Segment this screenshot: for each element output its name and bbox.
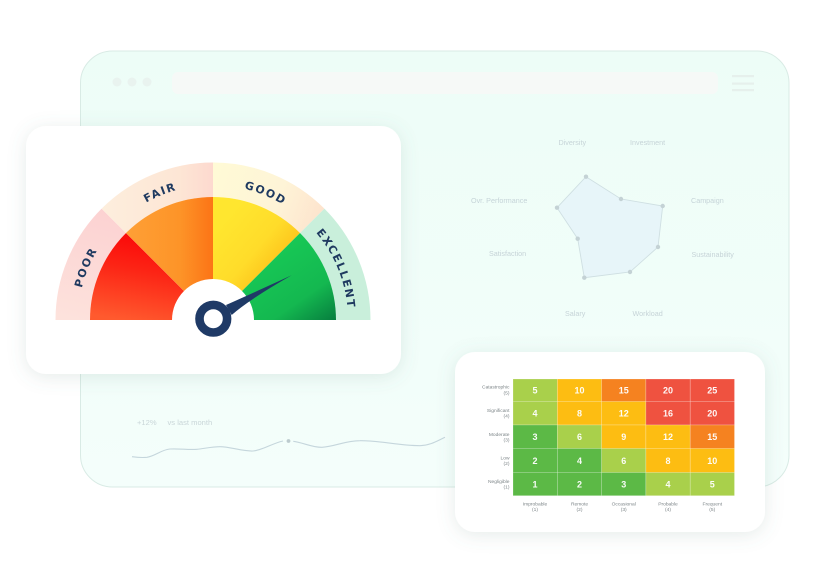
likelihood labels: (2) — [577, 507, 583, 513]
risk matrix values: 20 — [663, 386, 673, 396]
risk matrix values: 2 — [577, 480, 582, 490]
risk matrix values: 16 — [663, 408, 673, 418]
radar data points — [555, 174, 665, 280]
band: excellent — [300, 209, 371, 320]
risk matrix values: 1 — [532, 480, 538, 490]
likelihood labels: Frequent — [703, 502, 723, 508]
hamburger menu icon — [732, 75, 754, 91]
label: GOOD: GOOD — [246, 182, 285, 202]
likelihood labels: (5) — [709, 507, 716, 513]
risk matrix card — [455, 352, 765, 532]
severity labels: Negligible — [488, 479, 510, 485]
risk matrix values: 9 — [621, 432, 626, 442]
gauge colored sectors — [90, 197, 336, 320]
label: POOR: POOR — [74, 249, 97, 288]
window control dots — [112, 78, 152, 86]
risk matrix values: 5 — [710, 480, 715, 490]
risk matrix cells — [513, 379, 734, 496]
severity labels: (1) — [504, 484, 510, 490]
severity labels: (2) — [504, 461, 510, 467]
risk matrix values: 15 — [619, 386, 629, 396]
risk matrix values: 3 — [621, 480, 626, 490]
severity labels: Significant — [487, 408, 510, 414]
risk matrix values: 4 — [577, 456, 582, 466]
risk matrix values: 6 — [577, 432, 582, 442]
severity labels: Catastrophic — [482, 384, 510, 390]
severity labels: (3) — [504, 438, 510, 444]
label: FAIR: FAIR — [143, 184, 176, 202]
label: EXCELLENT: EXCELLENT — [316, 228, 356, 306]
radar axis labels: Satisfaction — [489, 249, 526, 258]
likelihood labels — [523, 502, 723, 513]
sector: orange — [126, 197, 213, 320]
sparkline panel: vs last month — [168, 418, 212, 427]
radar axis labels: Diversity — [558, 138, 586, 147]
band: good — [213, 162, 324, 233]
gauge hub — [172, 279, 254, 320]
severity labels: (4) — [504, 414, 510, 420]
radar axis labels: Workload — [632, 309, 663, 318]
radar axis labels: Sustainability — [692, 250, 734, 259]
severity labels — [482, 384, 510, 490]
sector: yellow — [213, 197, 300, 320]
radar axis labels: Investment — [630, 138, 665, 147]
likelihood labels: (1) — [532, 507, 538, 513]
likelihood labels: Occasional — [612, 502, 636, 508]
address bar — [172, 72, 718, 94]
risk matrix values: 10 — [707, 456, 717, 466]
sparkline panel — [132, 418, 445, 458]
radar axis labels — [471, 138, 734, 318]
risk matrix values: 15 — [707, 432, 717, 442]
band: fair — [102, 162, 213, 233]
sparkline caption: +12% — [137, 418, 157, 427]
risk matrix values: 10 — [574, 386, 585, 396]
risk matrix values: 6 — [621, 456, 626, 466]
risk matrix values: 20 — [707, 408, 717, 418]
band: poor — [55, 209, 126, 320]
radar axis labels: Campaign — [691, 196, 724, 205]
radar axis labels: Ovr. Performance — [471, 196, 527, 205]
risk matrix values: 12 — [619, 408, 629, 418]
likelihood labels: (4) — [665, 507, 671, 513]
sector: green — [213, 233, 336, 320]
risk matrix values: 2 — [532, 456, 538, 466]
likelihood labels: Remote — [571, 502, 588, 508]
radar chart — [471, 138, 734, 318]
gauge card — [22, 126, 404, 380]
likelihood labels: Probable — [658, 502, 678, 508]
sector: red — [90, 233, 213, 320]
gauge needle — [200, 275, 292, 333]
risk matrix values: 8 — [665, 456, 671, 466]
risk matrix values: 12 — [663, 432, 673, 442]
radar axis labels: Salary — [565, 309, 586, 318]
sparkline marker — [287, 439, 290, 443]
likelihood labels: Improbable — [523, 502, 548, 508]
risk matrix values: 3 — [532, 432, 538, 442]
browser window panel — [80, 51, 789, 487]
risk matrix values: 4 — [665, 480, 671, 490]
severity labels: Moderate — [489, 432, 510, 438]
gauge outer label band — [55, 162, 371, 320]
risk matrix values: 5 — [532, 386, 538, 396]
sparkline — [132, 437, 445, 458]
risk matrix values: 25 — [707, 386, 717, 396]
severity labels: (5) — [504, 390, 510, 396]
severity labels: Low — [501, 456, 510, 462]
risk matrix values — [532, 386, 717, 490]
risk matrix values: 8 — [577, 408, 582, 418]
radar polygon — [557, 177, 663, 278]
likelihood labels: (3) — [621, 507, 627, 513]
risk matrix values: 4 — [532, 408, 538, 418]
